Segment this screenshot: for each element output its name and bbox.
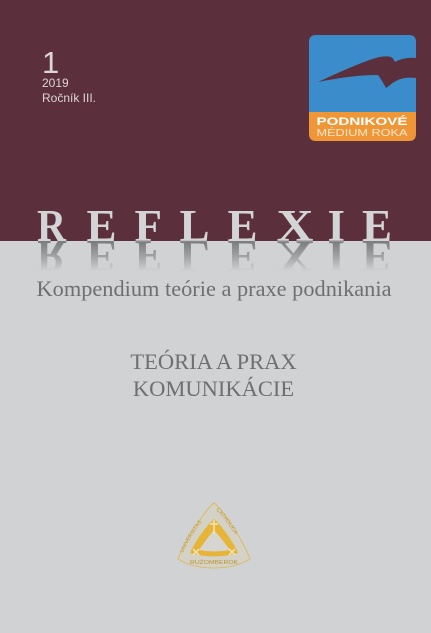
title: REFLEXIE: L [180,201,210,251]
title: REFLEXIE: R [37,201,66,251]
logo text: PODNIKOVÉ [316,115,408,128]
university emblem [178,502,250,568]
award logo: Podnikové médium roka [309,35,416,141]
emblem outline [178,503,250,568]
title: REFLEXIE: E [362,201,392,251]
year: 2019 [42,76,69,90]
heading: issue theme: KOMUNIKÁCIE [133,376,294,401]
emblem inner triangle [199,530,230,552]
emblem ring lettering left: UNIVERSITAS [180,520,202,552]
emblem cross top [210,520,218,534]
title: REFLEXIE: X [276,201,314,251]
emblem triangle [190,519,238,556]
issue information [42,45,96,105]
title: REFLEXIE: E [86,201,117,251]
title reflection: L [180,231,210,281]
logo subtext: MÉDIUM ROKA [316,126,408,139]
title reflection: R [37,231,66,281]
volume: Ročník III. [42,91,96,105]
panel: grey lower background [0,241,431,633]
emblem side crosses [193,549,235,555]
title reflection: I [328,231,345,281]
issue number: 1 [42,45,59,80]
title: REFLEXIE: F [134,201,162,251]
title: REFLEXIE [37,201,392,251]
icon: bird [318,56,416,88]
logo blue panel [309,35,416,112]
title: REFLEXIE: I [328,201,345,251]
emblem ring lettering right: CATHOLICA [216,508,238,534]
title reflection: E [228,231,258,281]
title reflection: X [276,231,314,281]
emblem lettering: RUŽOMBEROK [190,558,238,566]
logo orange band [309,112,416,141]
heading: issue theme: TEÓRIA A PRAX [130,348,297,374]
title: REFLEXIE: E [228,201,258,251]
subtitle: Kompendium teórie a praxe podnikania [36,276,392,301]
panel: maroon upper background [0,0,431,241]
title reflection: E [86,231,117,281]
title reflection: F [134,231,162,281]
title reflection [37,231,392,281]
title reflection: E [362,231,392,281]
heading: issue theme [130,348,297,401]
